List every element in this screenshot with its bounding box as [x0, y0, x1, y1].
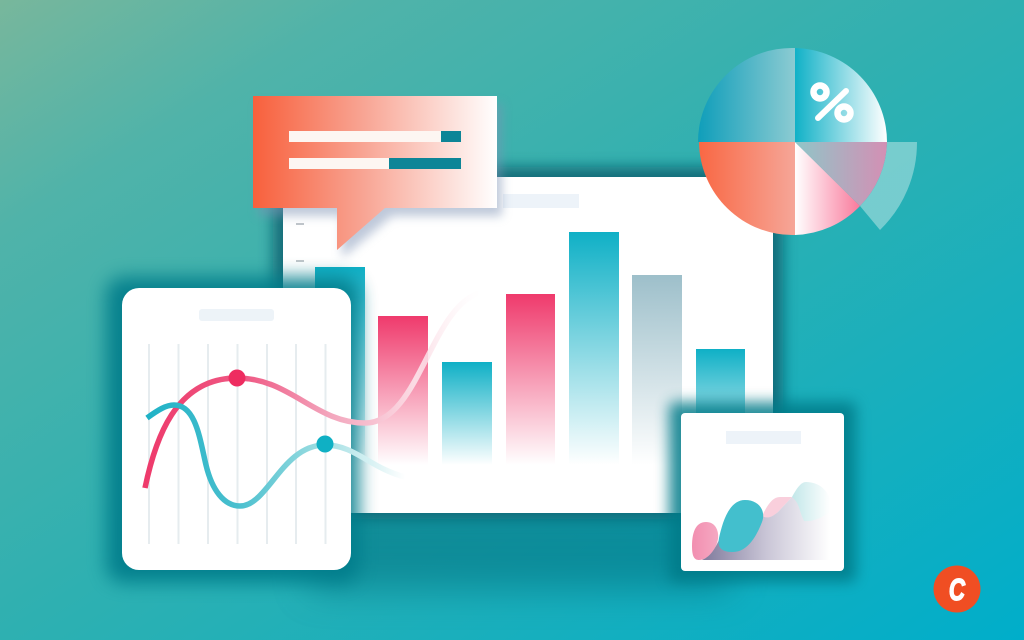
area chart — [692, 482, 830, 560]
panel: main bar chart — [283, 177, 773, 513]
outer wedge — [860, 142, 917, 230]
shadow: main panel wide — [310, 505, 730, 590]
logo badge: C — [949, 572, 965, 607]
header placeholder — [503, 194, 579, 208]
grid lines — [149, 344, 326, 544]
axis ticks — [296, 223, 304, 262]
data point: pink — [228, 370, 246, 386]
shadow: main panel close — [273, 167, 783, 519]
data point: teal — [316, 436, 334, 452]
header placeholder — [199, 309, 274, 321]
line: pink series — [145, 292, 482, 488]
shadow: area chart card — [669, 402, 856, 582]
bar chart — [315, 232, 745, 465]
panel: area chart card — [681, 413, 844, 571]
header placeholder — [726, 431, 801, 444]
pie chart — [698, 48, 917, 235]
panel: line chart card — [122, 288, 351, 570]
shadow: line chart card — [106, 277, 359, 583]
callout: speech bubble — [253, 96, 497, 250]
progress bar 2 — [289, 158, 461, 169]
logo badge — [934, 566, 980, 612]
progress bar 1 — [289, 131, 461, 142]
percent icon — [814, 86, 850, 120]
line: teal series — [147, 405, 405, 506]
shadow: speech bubble — [258, 104, 502, 258]
